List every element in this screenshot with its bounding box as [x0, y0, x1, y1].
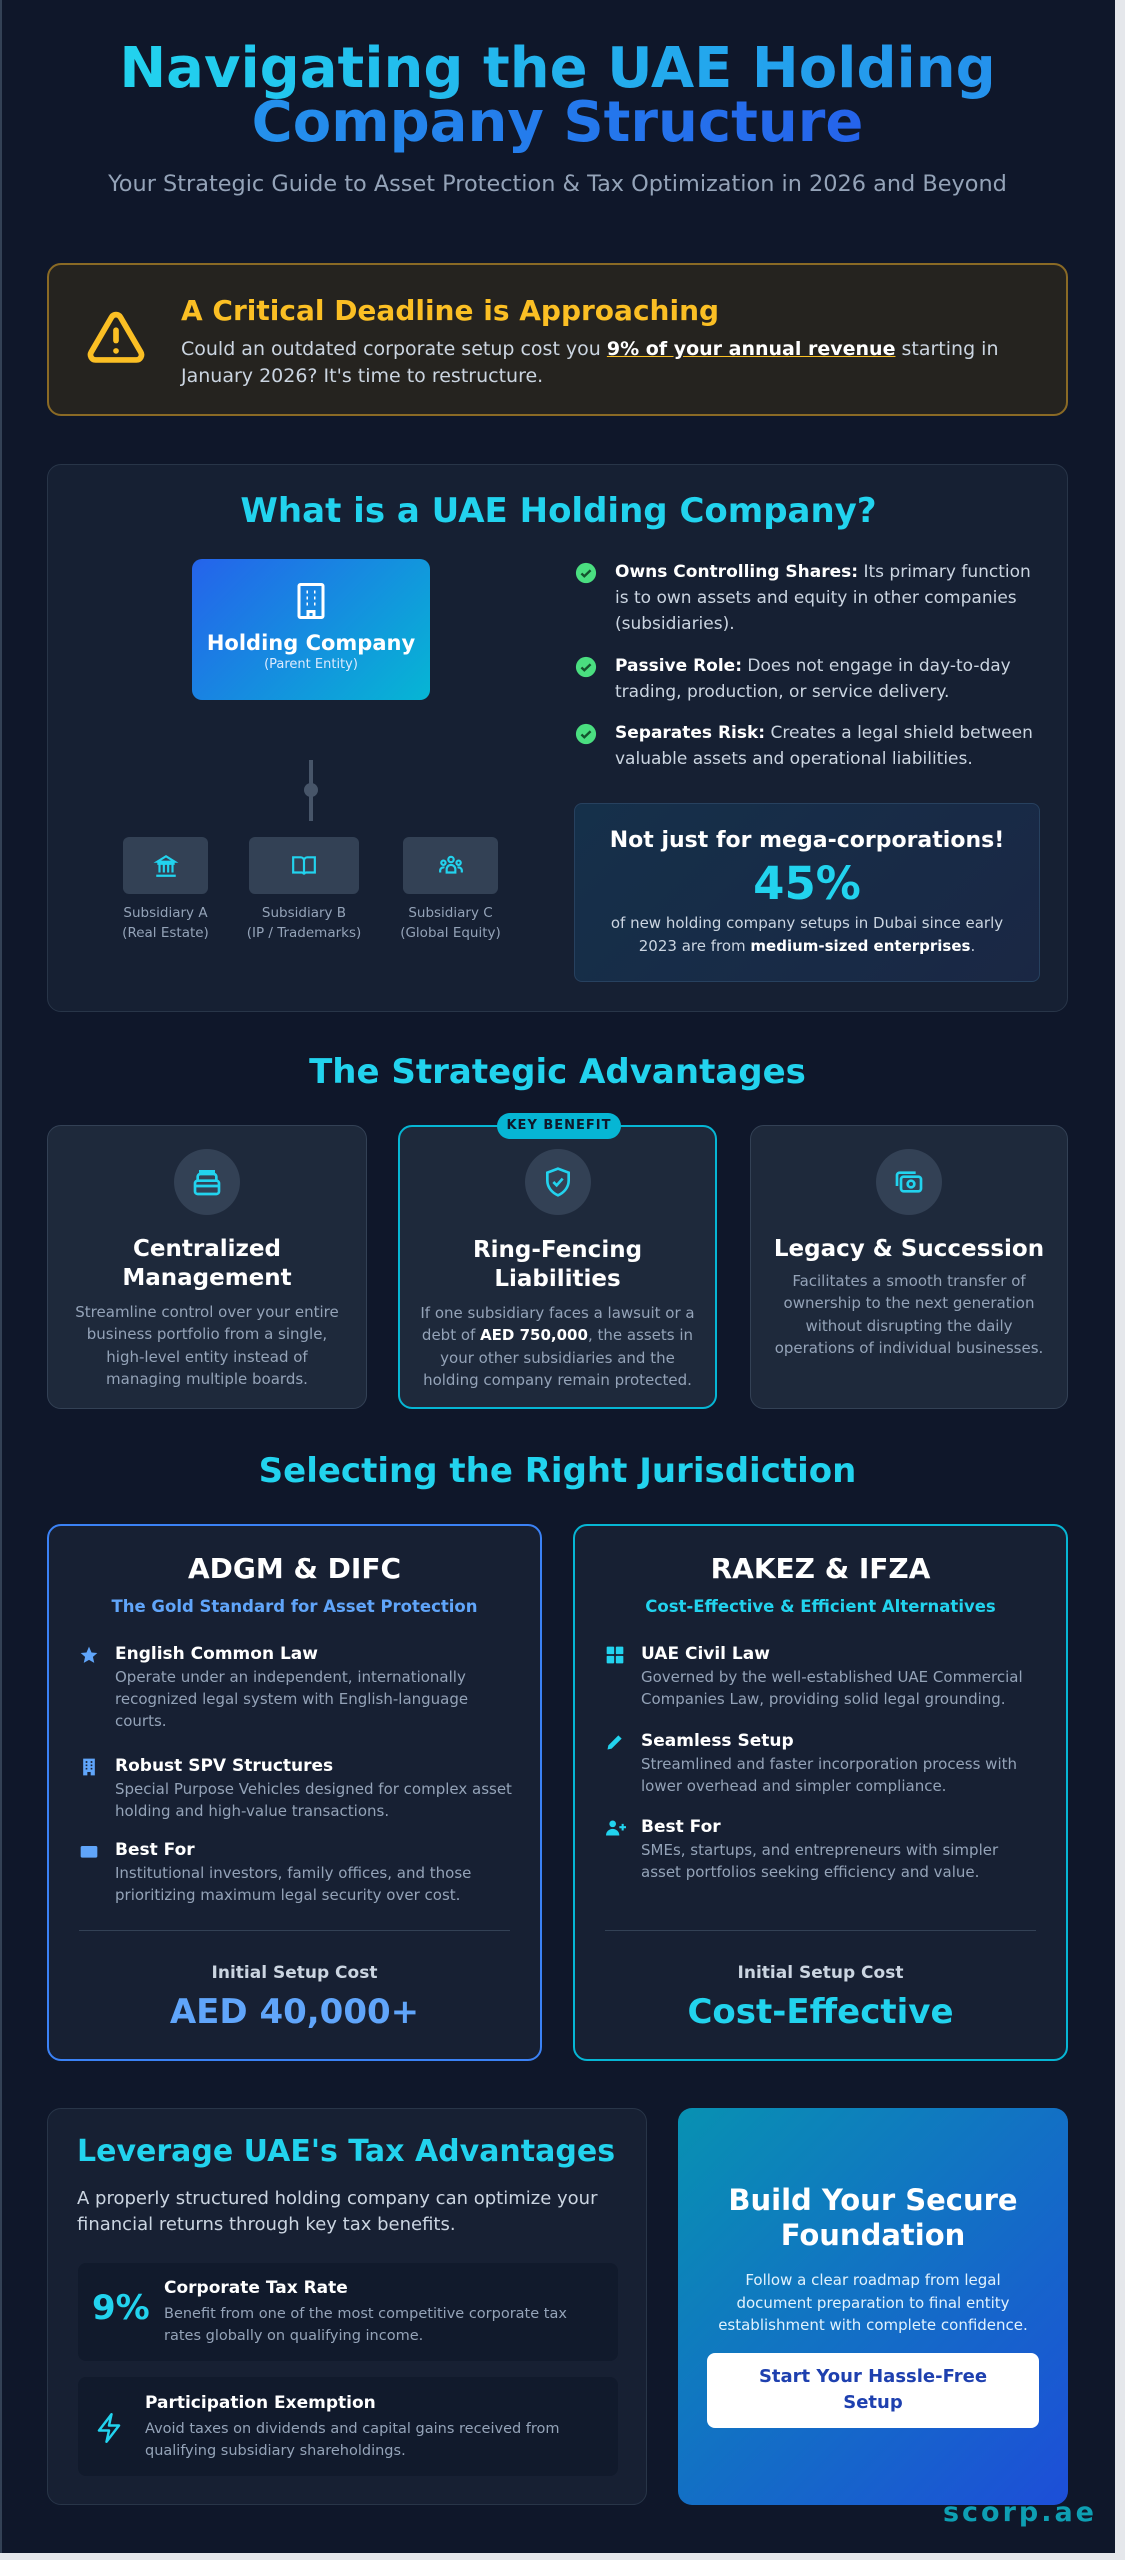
- subtitle: Your Strategic Guide to Asset Protection & Tax Optimization in 2026 and Beyond: [108, 171, 1007, 197]
- title: [119, 36, 996, 155]
- box: corporate tax rate: 9%: [92, 2288, 150, 2328]
- heading: jurisdiction: Selecting the Right Jurisdiction: [259, 1451, 856, 1491]
- card: centralized management: Streamline control over your entire business portfolio from a single, high-level entity instead of managing multiple boards.: [75, 1303, 339, 1388]
- item: UAE civil law: UAE Civil Law: [641, 1644, 770, 1664]
- card: centralized management: Centralized: [133, 1236, 281, 1262]
- box: participation exemption: Participation Exemption: [145, 2393, 376, 2413]
- button: [707, 2353, 1039, 2428]
- heading: Leverage UAE's Tax Advantages: [77, 2134, 615, 2169]
- diagram: holding structure: (Global Equity): [400, 925, 501, 941]
- heading: strategic advantages: The Strategic Advantages: [309, 1052, 806, 1092]
- stat callout: of new holding company setups in Dubai since early 2023 are from medium-sized enterprises.: [611, 914, 1003, 955]
- item: seamless setup: Streamlined and faster incorporation process with lower overhead and simpler compliance.: [641, 1755, 1017, 1795]
- panel: tax advantages: [47, 2108, 647, 2505]
- panel: ADGM & DIFC: ADGM & DIFC: [188, 1552, 401, 1585]
- panel: CTA: Build Your Secure: [728, 2183, 1018, 2217]
- diagram: holding structure: Subsidiary B: [262, 905, 346, 921]
- box: participation exemption: Avoid taxes on dividends and capital gains received from qualifying subsidiary shareholdings.: [145, 2421, 560, 2459]
- card: legacy & succession: Legacy & Succession: [774, 1236, 1044, 1262]
- box: corporate tax rate: Benefit from one of the most competitive corporate tax rates globally on qualifying income.: [164, 2306, 567, 2344]
- panel: RAKEZ & IFZA: RAKEZ & IFZA: [711, 1552, 930, 1585]
- item: SPV: Robust SPV Structures: [115, 1756, 333, 1776]
- diagram: holding structure: (Real Estate): [122, 925, 209, 941]
- cost: [170, 1963, 419, 2032]
- diagram: holding structure: Subsidiary A: [123, 905, 208, 921]
- icon: warning triangle: [88, 312, 144, 363]
- cost: Initial Setup Cost: [212, 1963, 377, 1983]
- panel: RAKEZ & IFZA: Cost-Effective & Efficient Alternatives: [645, 1597, 996, 1616]
- item: UAE civil law: [606, 1644, 1023, 1708]
- footer brand: scorp.ae: [943, 2497, 1097, 2528]
- item: best for: Best For: [641, 1817, 721, 1837]
- card: ring-fencing (key benefit): Liabilities: [494, 1266, 621, 1292]
- button: Setup: [843, 2392, 903, 2413]
- item: english common law: English Common Law: [115, 1644, 318, 1664]
- check item 2: Passive Role: Does not engage in day-to-day trading, production, or service delivery.: [615, 656, 1011, 702]
- panel: ADGM & DIFC: [47, 1524, 542, 2061]
- panel: CTA: Foundation: [781, 2218, 965, 2252]
- panel: ADGM & DIFC: The Gold Standard for Asset Protection: [112, 1597, 478, 1616]
- checklist: [576, 562, 1033, 769]
- card: ring-fencing (key benefit): [398, 1125, 717, 1409]
- button: Start Your Hassle-Free: [759, 2366, 987, 2387]
- stat callout: 45%: [753, 857, 861, 910]
- check item 3: Separates Risk: Creates a legal shield between valuable assets and operational liabilities.: [615, 723, 1033, 769]
- item: english common law: Operate under an independent, internationally recognized legal system with English-language courts.: [115, 1668, 468, 1730]
- card: ring-fencing (key benefit): Ring-Fencing: [473, 1237, 642, 1263]
- cost: AED 40,000+: [170, 1992, 419, 2032]
- holding company box: (Parent Entity): [264, 657, 358, 672]
- box: participation exemption: [78, 2377, 618, 2476]
- item: SPV: Special Purpose Vehicles designed for complex asset holding and high-value transactions.: [115, 1780, 512, 1820]
- subsidiary B: [249, 837, 359, 894]
- card: legacy & succession: [750, 1125, 1068, 1409]
- cost: Cost-Effective: [687, 1992, 954, 2032]
- item: best for: [606, 1817, 998, 1881]
- item: SPV: [83, 1756, 512, 1820]
- title: Company Structure: [252, 90, 863, 155]
- item: english common law: [80, 1644, 468, 1730]
- check item 1: Owns Controlling Shares: Its primary function is to own assets and equity in other companies (subsidiaries).: [615, 562, 1031, 634]
- panel: deadline warning: [47, 263, 1068, 416]
- cost: [687, 1963, 954, 2032]
- holding company box: Holding Company: [207, 631, 415, 655]
- stat callout: Not just for mega-corporations!: [610, 828, 1004, 853]
- warning heading: A Critical Deadline is Approaching: [181, 294, 719, 327]
- item: best for: Best For: [115, 1840, 195, 1860]
- stat callout: [574, 803, 1040, 982]
- panel: CTA: Follow a clear roadmap from legal document preparation to final entity establishment with complete confidence.: [718, 2271, 1028, 2334]
- box: corporate tax rate: [78, 2263, 618, 2361]
- item: seamless setup: [608, 1731, 1017, 1795]
- diagram: holding structure: (IP / Trademarks): [247, 925, 361, 941]
- diagram: holding structure: [122, 559, 501, 941]
- badge: key benefit: KEY BENEFIT: [506, 1118, 612, 1133]
- card: ring-fencing (key benefit): If one subsidiary faces a lawsuit or a debt of AED 750,000, the assets in your other subsidiaries and the holding company remain protected.: [420, 1304, 695, 1389]
- subsidiary C: [403, 837, 498, 894]
- card: legacy & succession: Facilitates a smooth transfer of ownership to the next generation without disrupting the daily operations of individual businesses.: [775, 1272, 1043, 1357]
- panel: RAKEZ & IFZA: [573, 1524, 1068, 2061]
- connector: [309, 760, 313, 821]
- diagram: holding structure: Subsidiary C: [408, 905, 493, 921]
- panel: what is a holding company: [47, 464, 1068, 1012]
- intro text: A properly structured holding company can optimize your financial returns through key tax benefits.: [77, 2188, 597, 2235]
- holding company box: [192, 559, 430, 700]
- card: centralized management: Management: [122, 1265, 292, 1291]
- item: best for: SMEs, startups, and entrepreneurs with simpler asset portfolios seeking efficiency and value.: [641, 1841, 998, 1881]
- item: best for: [80, 1840, 471, 1904]
- card: centralized management: [47, 1125, 367, 1409]
- badge: key benefit: [497, 1113, 621, 1139]
- title: Navigating the UAE Holding: [119, 36, 996, 101]
- item: best for: Institutional investors, family offices, and those prioritizing maximum legal security over cost.: [115, 1864, 471, 1904]
- panel: CTA: [678, 2108, 1068, 2505]
- item: UAE civil law: Governed by the well-established UAE Commercial Companies Law, providing solid legal grounding.: [641, 1668, 1023, 1708]
- box: corporate tax rate: Corporate Tax Rate: [164, 2278, 348, 2298]
- heading: What is a UAE Holding Company?: [240, 491, 877, 531]
- subsidiary A: [123, 837, 208, 894]
- cost: Initial Setup Cost: [738, 1963, 903, 1983]
- item: seamless setup: Seamless Setup: [641, 1731, 794, 1751]
- warning text: Could an outdated corporate setup cost you 9% of your annual revenue starting in January 2026? It's time to restructure.: [181, 338, 999, 387]
